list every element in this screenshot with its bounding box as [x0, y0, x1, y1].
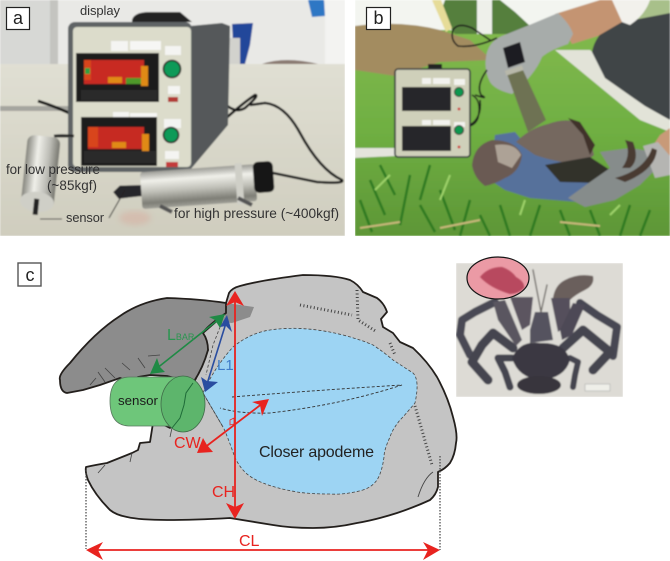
dactyl	[60, 298, 226, 393]
label: closer apodeme: Closer apodeme	[259, 444, 374, 461]
device	[190, 23, 230, 170]
highlight circle: claw	[467, 257, 529, 299]
label: for high pressure: for high pressure (~400kgf)	[174, 206, 339, 221]
panel letter a: a	[13, 8, 24, 28]
label: L1: L1	[217, 357, 234, 374]
panel c: claw diagram	[60, 275, 457, 560]
label: L bar: LBAR	[167, 327, 195, 344]
label: 85kgf: (~85kgf)	[47, 178, 97, 193]
label: display: display	[80, 3, 120, 18]
panel letter c	[18, 263, 41, 286]
label: CH: CH	[212, 484, 235, 501]
claw propodus	[86, 275, 457, 528]
dashed inner edges	[195, 322, 223, 427]
panel b: field measurement photo	[355, 0, 670, 236]
label: for low pressure: for low pressure	[6, 162, 100, 177]
high pressure cylinder	[112, 161, 275, 213]
dotted guides	[86, 456, 440, 550]
panel letter c: c	[26, 265, 34, 285]
panel: coconut crab photo	[456, 257, 623, 397]
device	[428, 64, 442, 70]
panel letter a	[6, 8, 30, 30]
label: CW: CW	[174, 435, 202, 452]
gloved hand 2	[568, 148, 655, 207]
low pressure cylinder	[19, 134, 61, 217]
label: CL: CL	[239, 533, 260, 550]
panel a: sensor device photo	[0, 0, 345, 236]
crab	[494, 131, 589, 203]
grass strokes	[360, 165, 650, 236]
sensor label: sensor	[118, 393, 158, 408]
dactyl patch	[222, 303, 254, 323]
tube	[503, 42, 525, 68]
pants	[592, 12, 670, 120]
closer apodeme	[203, 328, 417, 494]
arrow: L bar	[150, 314, 225, 374]
sleeve and arm	[612, 0, 651, 26]
arrow: CH	[226, 291, 244, 519]
label: sensor: sensor	[66, 210, 105, 225]
arrow: CW	[197, 399, 269, 453]
panel letter b: b	[373, 8, 384, 28]
sensor	[110, 376, 205, 432]
panel letter b	[366, 8, 390, 30]
cable	[452, 25, 497, 46]
cable	[213, 95, 342, 183]
arrow: CL	[86, 542, 440, 560]
arrow: L1	[201, 315, 232, 392]
glove	[486, 13, 573, 94]
